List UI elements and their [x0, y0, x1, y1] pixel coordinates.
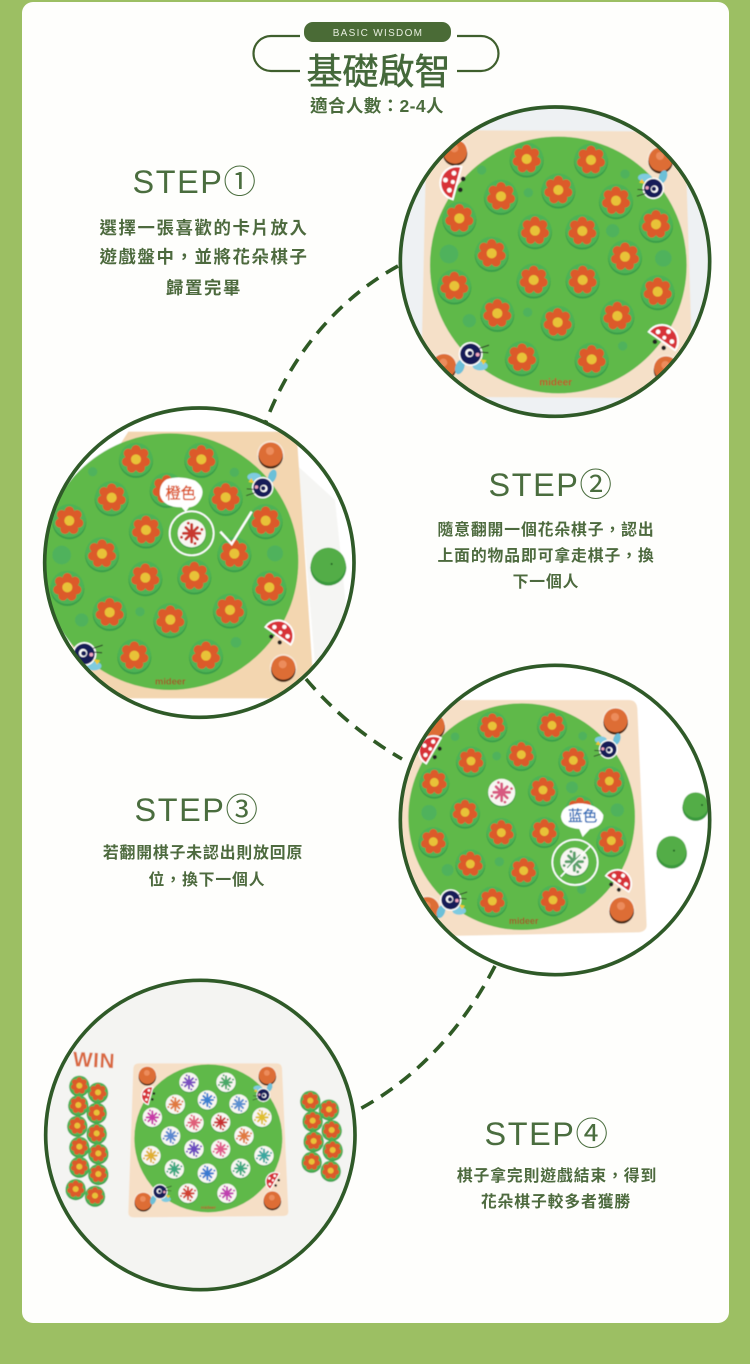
step 3 photo — [393, 663, 712, 977]
step 2 description: 上面的物品即可拿走棋子，換 — [437, 546, 655, 565]
step 1 photo: mideer — [539, 378, 572, 389]
step 1 photo — [398, 105, 712, 418]
step 1 description: 遊戲盤中，並將花朵棋子 — [100, 247, 308, 267]
heading block — [254, 22, 498, 116]
step 3 description — [103, 844, 303, 889]
step 1 description — [100, 218, 308, 298]
step 4 description — [457, 1166, 657, 1211]
right bracket — [457, 36, 498, 71]
step 2 description — [437, 520, 655, 591]
badge: basic wisdom — [304, 22, 451, 42]
step 4 photo — [44, 978, 357, 1292]
title: 基礎啟智 — [306, 51, 451, 92]
step 2 photo: mideer — [155, 676, 186, 686]
step 2 description: 下一個人 — [513, 573, 579, 591]
step 4 photo: WIN — [72, 1048, 116, 1073]
step 3 title: STEP③ — [134, 792, 260, 828]
step 3 photo: mideer — [509, 916, 539, 926]
step 1 description: 歸置完畢 — [166, 278, 242, 298]
subtitle: 適合人數：2-4人 — [310, 96, 444, 116]
step 1 title: STEP① — [132, 164, 258, 200]
step 4 photo: mideer — [201, 1205, 216, 1210]
step 3 photo: 蓝色 — [568, 808, 598, 825]
badge: basic wisdom: BASIC WISDOM — [333, 28, 423, 39]
step 4 description: 花朵棋子較多者獲勝 — [481, 1192, 631, 1211]
dashed connector 2 to 3 — [306, 679, 402, 759]
left bracket — [254, 36, 300, 71]
dashed connector 1 to 2 — [265, 266, 398, 424]
step 2 photo — [42, 406, 356, 719]
step 4 description: 棋子拿完則遊戲結束，得到 — [457, 1166, 657, 1185]
step 3 description: 位，換下一個人 — [149, 870, 265, 889]
step 1 description: 選擇一張喜歡的卡片放入 — [100, 218, 308, 238]
step 2 title: STEP② — [488, 467, 614, 503]
step 2 photo: 橙色 — [165, 486, 196, 503]
step 4 title: STEP④ — [484, 1116, 610, 1152]
step 2 description: 隨意翻開一個花朵棋子，認出 — [437, 520, 655, 539]
step 3 description: 若翻開棋子未認出則放回原 — [103, 844, 303, 862]
dashed connector 3 to 4 — [358, 966, 495, 1110]
